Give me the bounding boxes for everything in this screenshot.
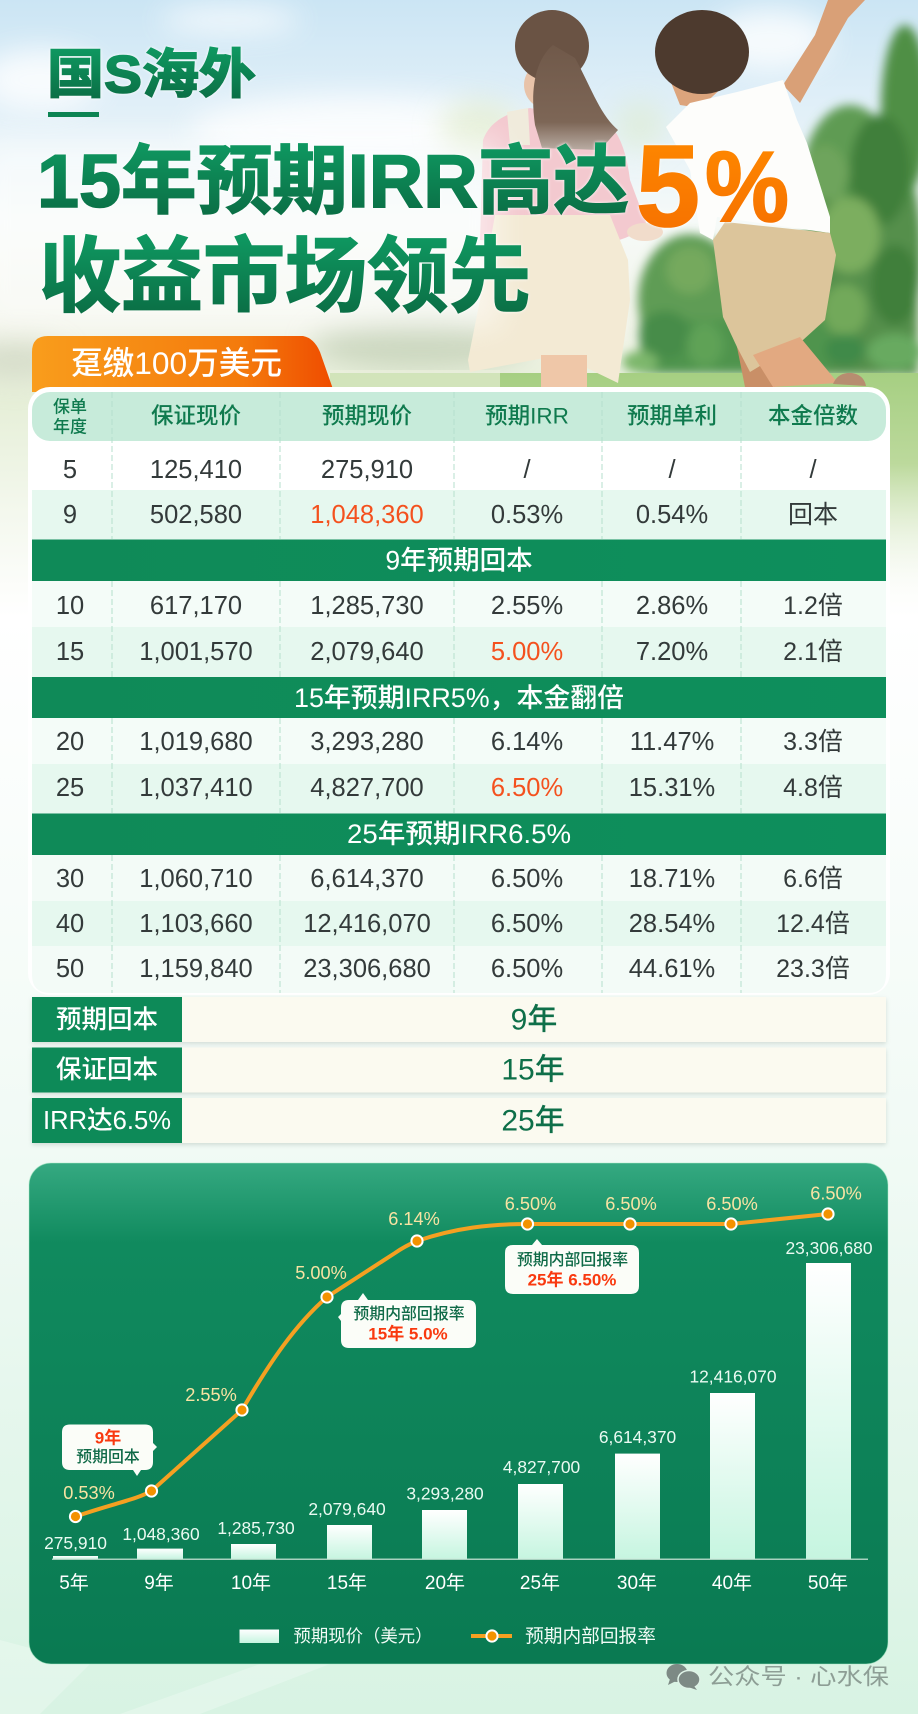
axis labels: 20年: [425, 1572, 465, 1594]
bar value labels: [44, 1238, 873, 1553]
IRR labels: 6.50%: [810, 1184, 862, 1204]
table header row: 预期现价: [322, 404, 412, 428]
summary: guaranteed payback: 保证回本: [56, 1056, 158, 1084]
row: year 50: 23.3倍: [776, 955, 850, 983]
legend: 预期现价（美元）: [293, 1626, 433, 1646]
summary: expected payback: 预期回本: [56, 1006, 158, 1034]
row: year 5: [63, 456, 817, 484]
legend: 预期内部回报率: [525, 1626, 656, 1646]
IRR labels: 6.50%: [706, 1194, 758, 1214]
bar value labels: 1,048,360: [122, 1524, 200, 1544]
row: year 20: 3.3倍: [783, 728, 843, 756]
row: year 20: 3,293,280: [310, 728, 424, 756]
row: year 50: 50: [56, 955, 84, 983]
callout: 25-year IRR: 25年 6.50%: [528, 1270, 616, 1290]
row: year 20: 11.47%: [630, 728, 714, 756]
banner: 9-year payback: [32, 540, 886, 581]
girl: [468, 10, 663, 387]
row: year 20: 1,019,680: [139, 728, 253, 756]
IRR line: [70, 1208, 834, 1522]
row: year 10: 617,170: [150, 592, 242, 620]
banner: 9-year payback: 9年预期回本: [385, 546, 533, 576]
banner: 15-year IRR: 15年预期IRR5%，本金翻倍: [294, 683, 624, 713]
row: year 15: 1,001,570: [139, 638, 253, 666]
row: year 30: 18.71%: [629, 865, 715, 893]
grass: [330, 373, 918, 600]
bar value labels: 12,416,070: [689, 1366, 777, 1386]
icon: wechat: [666, 1664, 700, 1690]
bar value labels: 2,079,640: [308, 1499, 386, 1519]
callout: 9-year payback: 预期回本: [76, 1448, 140, 1466]
row: year 5: 5: [63, 456, 77, 484]
row: year 10: 10: [56, 592, 84, 620]
summary: IRR reaches 6.5%: 25年: [501, 1104, 565, 1138]
table header row: 预期单利: [627, 404, 717, 428]
row: year 40: 6.50%: [491, 910, 563, 938]
summary: IRR reaches 6.5%: [32, 1098, 886, 1143]
watermark: [666, 1664, 890, 1690]
row: year 50: 44.61%: [629, 955, 715, 983]
row: year 50: 6.50%: [491, 955, 563, 983]
headline: 15年预期IRR高达: [37, 139, 629, 223]
axis labels: 40年: [712, 1572, 752, 1594]
summary: IRR reaches 6.5%: IRR达6.5%: [43, 1107, 171, 1135]
headline: 收益市场领先: [39, 232, 531, 322]
row: year 9: 0.53%: [491, 501, 563, 529]
row: year 40: 12,416,070: [303, 910, 431, 938]
IRR labels: [63, 1184, 862, 1503]
row: year 50: 1,159,840: [139, 955, 253, 983]
table header row: 预期IRR: [485, 404, 569, 428]
callout: 9-year payback: [62, 1424, 157, 1476]
axis labels: 25年: [520, 1572, 560, 1594]
callout: 25-year IRR: [505, 1239, 639, 1294]
axis labels: [59, 1572, 848, 1594]
callout: 9-year payback: 9年: [95, 1428, 121, 1448]
IRR labels: 2.55%: [185, 1385, 237, 1405]
row: year 10: 2.86%: [636, 592, 708, 620]
row: year 50: 23,306,680: [303, 955, 431, 983]
row: year 30: 30: [56, 865, 84, 893]
brand title: 国S海外: [47, 46, 256, 104]
row: year 9: 0.54%: [636, 501, 708, 529]
row: year 30: 6.50%: [491, 865, 563, 893]
row: year 15: 2.1倍: [783, 638, 843, 666]
bar value labels: 1,285,730: [217, 1518, 295, 1538]
callout: 25-year IRR: 预期内部回报率: [517, 1251, 628, 1269]
row: year 30: [56, 865, 843, 893]
row: year 10: 1.2倍: [783, 592, 843, 620]
bar value labels: 6,614,370: [599, 1427, 676, 1447]
bar value labels: 4,827,700: [503, 1457, 580, 1477]
table header row: 年度: [53, 418, 87, 436]
row: year 15: 2,079,640: [310, 638, 424, 666]
IRR labels: 0.53%: [63, 1483, 115, 1503]
premium tab: 趸缴100万美元: [71, 345, 282, 381]
table card: [28, 387, 890, 995]
axis labels: 9年: [144, 1572, 174, 1594]
axis labels: 15年: [327, 1572, 367, 1594]
row: year 40: 28.54%: [629, 910, 715, 938]
row: year 40: [56, 910, 850, 938]
banner: 25-year IRR: 25年预期IRR6.5%: [347, 819, 571, 849]
summary: guaranteed payback: [32, 1048, 886, 1092]
row: year 40: 1,103,660: [139, 910, 253, 938]
row: year 40: 12.4倍: [776, 910, 850, 938]
row: year 9: 9: [63, 501, 77, 529]
bar value labels: 23,306,680: [785, 1238, 873, 1258]
callout: 15-year IRR: 15年 5.0%: [368, 1324, 448, 1344]
headline: [37, 121, 789, 322]
axis labels: 5年: [59, 1572, 89, 1594]
banner: 25-year IRR: [32, 814, 886, 855]
row: year 25: [56, 774, 843, 802]
clouds: [0, 8, 830, 164]
far trees: [0, 100, 665, 380]
row: year 9: 1,048,360: [310, 501, 424, 529]
row: year 40: 40: [56, 910, 84, 938]
row: year 25: 25: [56, 774, 84, 802]
bar value labels: 275,910: [44, 1533, 107, 1553]
callout: 15-year IRR: 预期内部回报率: [353, 1305, 465, 1323]
row: year 15: 7.20%: [636, 638, 708, 666]
row: year 9: [63, 501, 838, 529]
bars: [53, 1263, 851, 1559]
premium tab: [32, 336, 334, 392]
IRR labels: 6.50%: [505, 1194, 556, 1214]
IRR labels: 6.14%: [388, 1209, 440, 1229]
row: year 5: /: [809, 456, 817, 484]
row: year 15: [56, 638, 843, 666]
row: year 20: 20: [56, 728, 84, 756]
row: year 20: 6.14%: [491, 728, 563, 756]
banner: 15-year IRR: [32, 677, 886, 718]
bar value labels: 3,293,280: [406, 1484, 484, 1504]
IRR labels: 6.50%: [605, 1194, 657, 1214]
row: year 5: 125,410: [150, 456, 242, 484]
axis labels: 50年: [808, 1572, 848, 1594]
row: year 25: 1,037,410: [139, 774, 253, 802]
summary: expected payback: [32, 997, 886, 1042]
row: year 9: 回本: [788, 501, 838, 529]
right trees: [622, 25, 918, 375]
row: year 30: 6,614,370: [310, 865, 424, 893]
row: year 10: 2.55%: [491, 592, 563, 620]
row: year 30: 1,060,710: [139, 865, 253, 893]
IRR labels: 5.00%: [295, 1263, 347, 1283]
boy: [655, 0, 866, 387]
axis labels: 10年: [231, 1572, 271, 1594]
row: year 5: 275,910: [321, 456, 413, 484]
row: year 20: [56, 728, 843, 756]
row: year 9: 502,580: [150, 501, 242, 529]
row: year 10: [56, 592, 843, 620]
headline: %: [705, 131, 789, 243]
row: year 30: 6.6倍: [783, 865, 843, 893]
table header row: 本金倍数: [768, 404, 858, 428]
chart panel: [29, 1163, 888, 1664]
row: year 50: [56, 955, 850, 983]
row: year 5: /: [523, 456, 531, 484]
row: year 25: 4,827,700: [310, 774, 424, 802]
decorative bottom stripes: [0, 1640, 90, 1714]
row: year 25: 4.8倍: [783, 774, 843, 802]
headline: 5: [636, 121, 700, 251]
callout: 15-year IRR: [338, 1293, 476, 1348]
row: year 15: 15: [56, 638, 84, 666]
watermark: 公众号 · 心水保: [708, 1664, 890, 1690]
row: year 10: 1,285,730: [310, 592, 424, 620]
row: year 5: /: [668, 456, 676, 484]
row: year 15: 5.00%: [491, 638, 563, 666]
summary: guaranteed payback: 15年: [501, 1054, 565, 1086]
table header row: 保证现价: [151, 404, 241, 428]
row: year 25: 6.50%: [491, 774, 563, 802]
white haze behind headline: [0, 138, 500, 328]
row: year 25: 15.31%: [629, 774, 715, 802]
table header row: [53, 398, 858, 436]
legend: [240, 1626, 656, 1646]
table header row: 保单: [53, 398, 87, 416]
summary: expected payback: 9年: [511, 1004, 557, 1036]
axis labels: 30年: [617, 1572, 657, 1594]
